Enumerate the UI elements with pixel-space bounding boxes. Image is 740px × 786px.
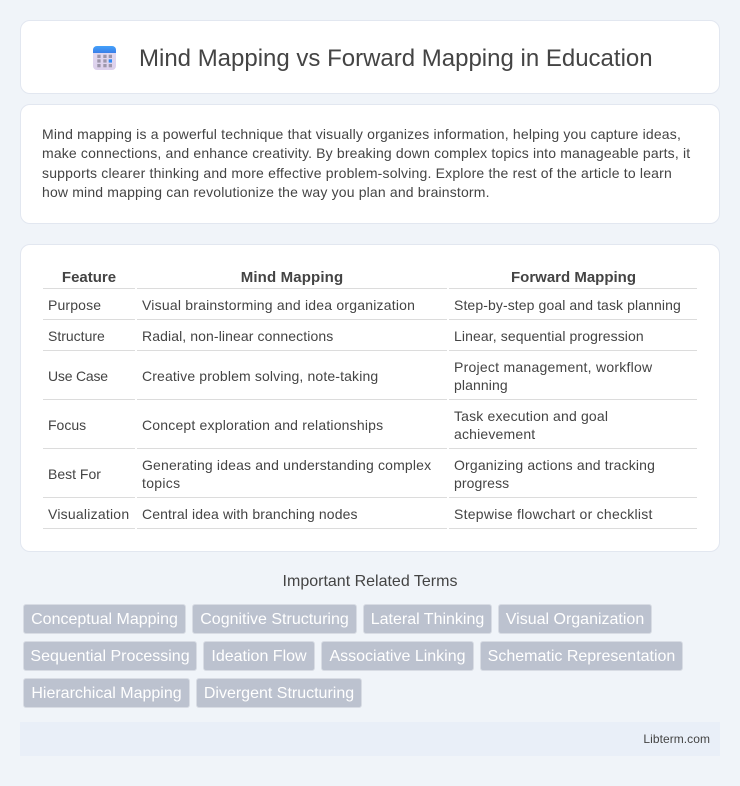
row: Best For: Generating ideas and understanding complex: [142, 457, 431, 473]
related terms tags: Schematic Representation: [488, 648, 675, 665]
related terms tags: Visual Organization: [506, 611, 644, 628]
intro paragraph: [42, 126, 690, 200]
row: Use Case: Creative problem solving, note-taking: [142, 368, 378, 384]
intro paragraph: how mind mapping can revolutionize the way you plan and brainstorm.: [42, 184, 490, 200]
row: Visualization: Stepwise flowchart or checklist: [454, 506, 653, 522]
related terms tags: Divergent Structuring: [204, 685, 354, 702]
row: Purpose: Purpose: [48, 297, 101, 313]
icon: calendar: [93, 46, 116, 70]
footer bar: [20, 722, 720, 756]
row: Visualization: Central idea with branching nodes: [142, 506, 358, 522]
related terms tags: Conceptual Mapping: [31, 611, 178, 628]
row: Focus: achievement: [454, 426, 535, 442]
table header: [62, 269, 636, 286]
related terms tags: Lateral Thinking: [371, 611, 484, 628]
row: Use Case: Project management, workflow: [454, 359, 652, 375]
row: Purpose: Visual brainstorming and idea organization: [142, 297, 415, 313]
row: Focus: Focus: [48, 417, 86, 433]
row: Structure: [48, 328, 644, 344]
intro paragraph: supports clearer thinking and more effective problem-solving. Explore the rest of the article to learn: [42, 165, 672, 181]
related terms tags: Ideation Flow: [211, 648, 307, 665]
intro text panel: [20, 104, 720, 224]
comparison table panel: [20, 244, 720, 552]
header panel: [20, 20, 720, 94]
row: Best For: [48, 457, 655, 491]
related terms tags: [23, 604, 683, 708]
title: Mind Mapping vs Forward Mapping in Education: [139, 45, 653, 72]
table header: Forward Mapping: [511, 269, 636, 286]
row: Use Case: [48, 359, 652, 393]
row: Structure: Linear, sequential progression: [454, 328, 644, 344]
row: Purpose: [48, 297, 681, 313]
row: Best For: Organizing actions and tracking: [454, 457, 655, 473]
row: Visualization: Visualization: [48, 506, 129, 522]
row: Purpose: Step-by-step goal and task planning: [454, 297, 681, 313]
row: Best For: topics: [142, 475, 180, 491]
row: Use Case: Use Case: [48, 368, 108, 384]
row: Structure: Structure: [48, 328, 105, 344]
related terms tags: Hierarchical Mapping: [31, 685, 182, 702]
row: Use Case: planning: [454, 377, 508, 393]
related terms heading: Important Related Terms: [283, 573, 457, 590]
row: Structure: Radial, non-linear connections: [142, 328, 333, 344]
related terms tags: Associative Linking: [329, 648, 466, 665]
footer credit: Libterm.com: [643, 732, 710, 746]
row: Focus: Concept exploration and relationships: [142, 417, 383, 433]
related terms tags: Cognitive Structuring: [200, 611, 349, 628]
related terms tags: Sequential Processing: [30, 648, 190, 665]
intro paragraph: make connections, and enhance creativity. By breaking down complex topics into manageable parts, it: [42, 145, 690, 161]
table header: Feature: [62, 269, 116, 286]
row: Best For: Best For: [48, 466, 101, 482]
row: Best For: progress: [454, 475, 509, 491]
intro paragraph: Mind mapping is a powerful technique that visually organizes information, helping you capture ideas,: [42, 126, 681, 142]
table header: Mind Mapping: [241, 269, 343, 286]
row: Focus: [48, 408, 608, 442]
row: Focus: Task execution and goal: [454, 408, 608, 424]
row: Visualization: [48, 506, 653, 522]
